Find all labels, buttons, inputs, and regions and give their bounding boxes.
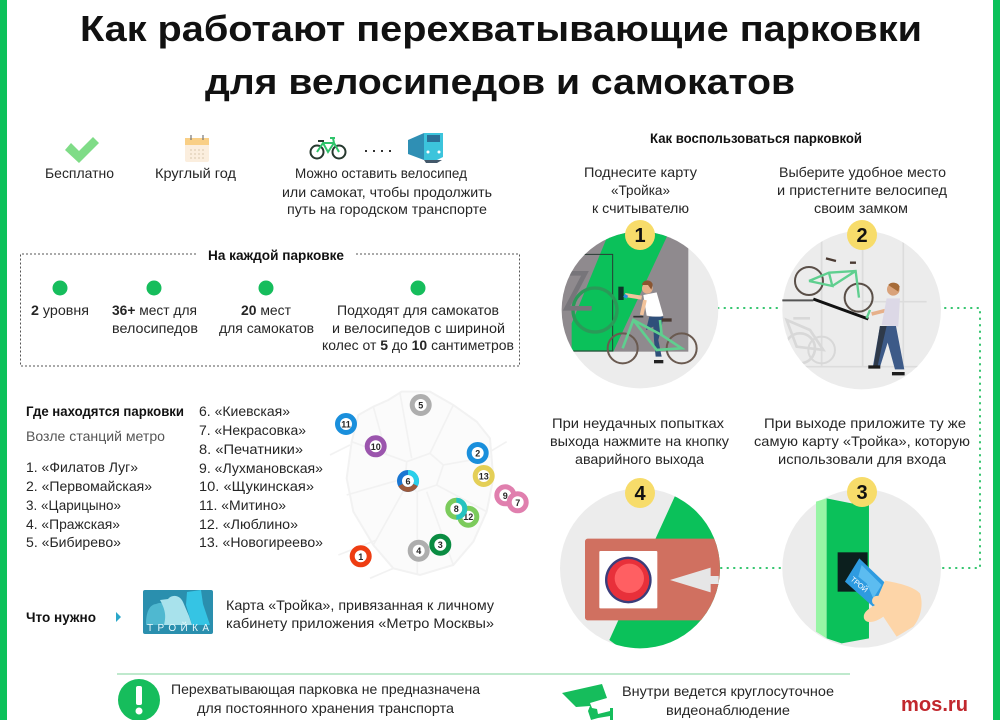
- station list: 3. «Царицыно»: [26, 497, 121, 513]
- marker 11: [338, 416, 354, 432]
- station list: 13. «Новогиреево»: [199, 534, 323, 550]
- marker 7: 7: [515, 498, 520, 508]
- item: levels: [31, 280, 89, 318]
- step 1 caption: [584, 164, 697, 216]
- item: bike places: 36+ мест для: [112, 302, 197, 318]
- illustration: card at reader: [782, 489, 941, 648]
- station list: 12. «Люблино»: [199, 516, 298, 532]
- step 2 caption: своим замком: [814, 200, 908, 216]
- item: bike places: велосипедов: [112, 320, 198, 336]
- panel: step 4: [551, 418, 729, 648]
- marker 13: [475, 468, 492, 484]
- station list: 11. «Митино»: [199, 497, 286, 513]
- item: wheel width: колес от 5 до 10 сантиметров: [322, 337, 514, 353]
- step 3 caption: При выходе приложите ту же: [764, 415, 966, 431]
- step connectors: [718, 308, 980, 568]
- troika card: [143, 590, 213, 634]
- marker 10: 10: [371, 442, 381, 452]
- item: wheel width: [322, 280, 514, 353]
- station list: 4. «Пражская»: [26, 516, 120, 532]
- step 4 caption: При неудачных попытках: [552, 415, 724, 431]
- item: scooter places: для самокатов: [219, 320, 314, 336]
- notice: video surveillance: [562, 683, 834, 720]
- item: levels: 2 уровня: [31, 302, 89, 318]
- step 4 caption: аварийного выхода: [575, 451, 704, 467]
- marker 1: [352, 548, 369, 565]
- marker 10: [367, 438, 384, 455]
- step 1 caption: к считывателю: [592, 200, 689, 216]
- map of Moscow: [330, 392, 526, 578]
- map base: [330, 392, 507, 578]
- panel: step 1: [550, 164, 718, 388]
- step 3 caption: самую карту «Тройка», которую: [754, 433, 970, 449]
- marker 6: [400, 472, 416, 490]
- icon: exclamation: [118, 679, 160, 720]
- item: bike places: [112, 280, 198, 336]
- title: Как работают перехватывающие парковки: [80, 8, 922, 49]
- item: wheel width: и велосипедов с шириной: [332, 320, 505, 336]
- marker 9: [497, 487, 514, 504]
- title: для велосипедов и самокатов: [205, 61, 795, 102]
- step 2 caption: [777, 164, 947, 216]
- step 4 caption: [550, 415, 729, 467]
- item: scooter places: [219, 280, 314, 336]
- notice: not for permanent storage: Перехватывающая парковка не предназначена: [171, 681, 480, 697]
- badge 3: 3: [856, 482, 868, 504]
- icon: train: [408, 133, 443, 163]
- notice: not for permanent storage: для постоянного хранения транспорта: [197, 700, 454, 716]
- item: scooter places: 20 мест: [241, 302, 292, 318]
- step 3 caption: [754, 415, 970, 467]
- marker 5: [412, 396, 429, 414]
- panel: step 3: [754, 415, 970, 648]
- marker 8: [448, 500, 465, 517]
- benefit: free: Бесплатно: [45, 165, 114, 181]
- panel: at every parking: [20, 247, 520, 366]
- illustration: emergency button: [560, 490, 720, 648]
- marker 2: 2: [475, 448, 480, 458]
- marker 6: 6: [405, 476, 411, 486]
- benefit: transfer to transport: или самокат, чтобы продолжить: [282, 184, 492, 200]
- station list: 8. «Печатники»: [199, 441, 303, 457]
- station list: 10. «Щукинская»: [199, 478, 314, 494]
- step 1 caption: Поднесите карту: [584, 164, 697, 180]
- icon: bicycle: [310, 138, 346, 158]
- benefit: all year: [155, 135, 236, 181]
- benefit: transfer to transport: [282, 133, 492, 217]
- station list: 5. «Бибирево»: [26, 534, 121, 550]
- how-to heading: Как воспользоваться парковкой: [650, 130, 862, 146]
- benefit: transfer to transport: Можно оставить велосипед: [295, 165, 467, 181]
- marker 5: 5: [418, 400, 423, 410]
- benefit: all year: Круглый год: [155, 165, 236, 181]
- badge 1: 1: [634, 225, 646, 247]
- badge 3: [847, 477, 877, 507]
- step 3 caption: использовали для входа: [778, 451, 946, 467]
- marker 7: [509, 494, 526, 511]
- what you need: [26, 590, 494, 634]
- notice: video surveillance: видеонаблюдение: [666, 702, 790, 718]
- marker 2: [469, 444, 486, 462]
- what you need: Что нужно: [26, 609, 96, 625]
- marker 1: 1: [358, 552, 363, 562]
- station list: [26, 403, 323, 550]
- station list: Где находятся парковки: [26, 403, 184, 419]
- step 2 caption: и пристегните велосипед: [777, 182, 947, 198]
- marker 3: [432, 536, 449, 553]
- station list: 7. «Некрасовка»: [199, 422, 306, 438]
- station list: 6. «Киевская»: [199, 403, 290, 419]
- marker 12: [460, 508, 477, 525]
- troika card: ТРОЙКА: [147, 621, 209, 634]
- icon: calendar: [185, 135, 209, 162]
- icon: camera: [562, 684, 613, 720]
- marker 4: [410, 542, 427, 559]
- illustration: card at reader: ТРОЙ: [849, 575, 870, 594]
- notice: not for permanent storage: [118, 679, 480, 720]
- icon: check mark: [65, 137, 99, 163]
- dots between icons: [365, 150, 393, 152]
- illustration: cyclist at reader: [562, 233, 718, 388]
- benefit: transfer to transport: путь на городском транспорте: [287, 201, 487, 217]
- badge 2: 2: [856, 225, 868, 247]
- what you need: кабинету приложения «Метро Москвы»: [226, 615, 494, 631]
- marker 3: 3: [438, 540, 443, 550]
- what you need: Карта «Тройка», привязанная к личному: [226, 597, 494, 613]
- badge 4: [625, 478, 655, 508]
- badge 2: [847, 220, 877, 250]
- marker 9: 9: [503, 491, 508, 501]
- marker 11: 11: [341, 420, 351, 430]
- badge 4: 4: [634, 483, 646, 505]
- marker 8: 8: [454, 504, 459, 514]
- notice: video surveillance: Внутри ведется круглосуточное: [622, 683, 834, 699]
- station list: 9. «Лухмановская»: [199, 460, 323, 476]
- step 2 caption: Выберите удобное место: [779, 164, 946, 180]
- item: wheel width: Подходят для самокатов: [337, 302, 499, 318]
- marker 12: 12: [463, 512, 473, 522]
- station list: 1. «Филатов Луг»: [26, 459, 138, 475]
- step 4 caption: выхода нажмите на кнопку: [550, 433, 729, 449]
- benefit: free: [45, 137, 114, 181]
- marker 13: 13: [479, 472, 489, 482]
- illustration: bike on rack: [782, 231, 941, 389]
- icon: arrow marker: [116, 612, 121, 622]
- panel heading: На каждой парковке: [208, 247, 344, 263]
- station list: Возле станций метро: [26, 428, 165, 444]
- logo: mos.ru: mos.ru: [901, 694, 968, 716]
- badge 1: [625, 220, 655, 250]
- marker 4: 4: [416, 546, 421, 556]
- panel: step 2: [777, 164, 947, 389]
- step 1 caption: «Тройка»: [611, 182, 670, 198]
- title: [80, 8, 922, 102]
- station list: 2. «Первомайская»: [26, 478, 152, 494]
- footer divider: [117, 673, 850, 675]
